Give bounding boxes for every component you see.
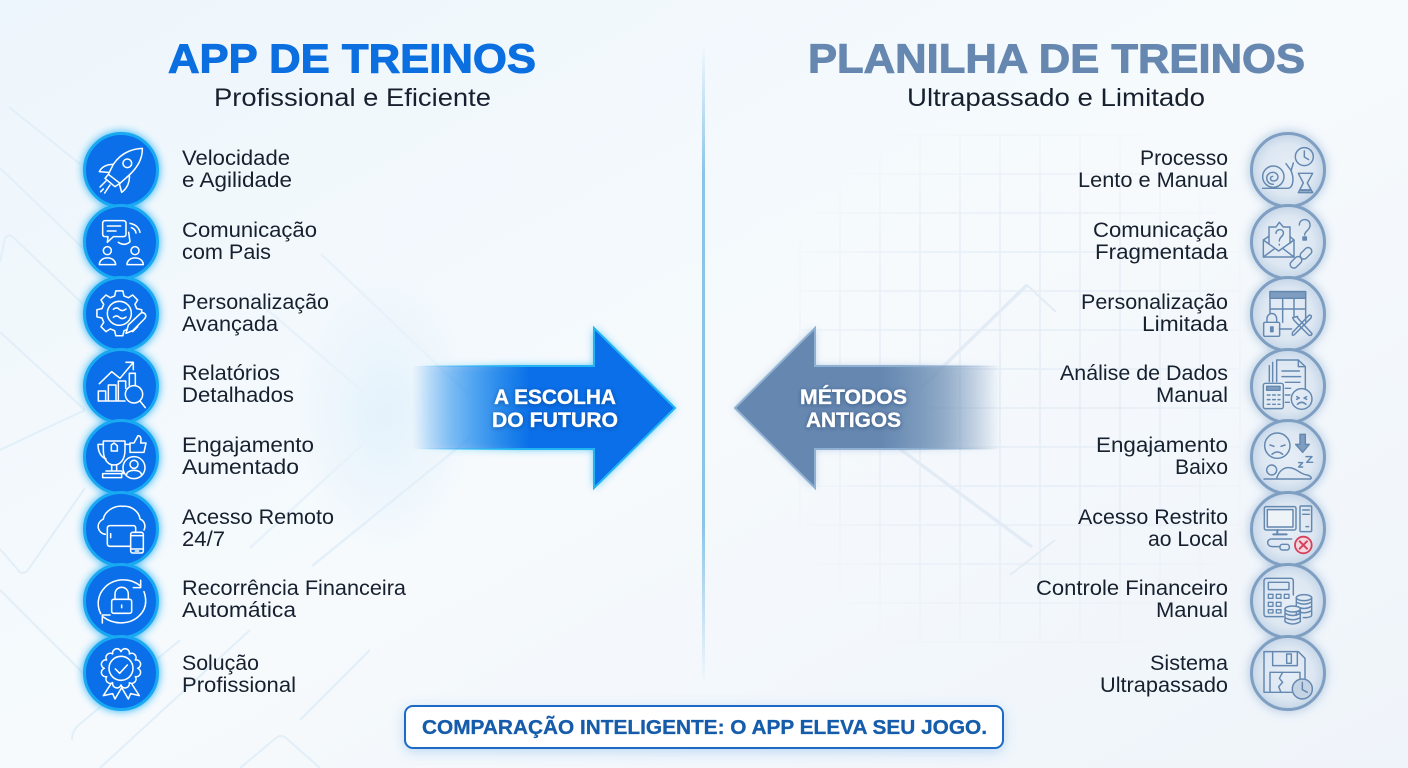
row: recorrencia [84, 564, 406, 638]
row: sistema ultrapassado: Sistema [1150, 652, 1228, 675]
arrow: metodos antigos [735, 328, 1000, 488]
icon: snail, clock and hourglass [1263, 148, 1313, 193]
background [0, 106, 1213, 768]
row: relatorios: Relatórios [182, 362, 280, 385]
icon: lock with cycle arrows [98, 580, 146, 623]
row: controle financeiro [1036, 564, 1324, 638]
row: acesso restrito [1078, 492, 1324, 566]
row: personalizacao: Avançada [182, 313, 278, 336]
circle shadow column [1249, 131, 1327, 712]
arrow label: MÉTODOS [800, 386, 907, 409]
row: engajamento baixo: Engajamento [1096, 434, 1228, 457]
panel: planilha de treinos header [808, 36, 1305, 112]
row: acesso remoto [84, 492, 334, 566]
arrow: a escolha do futuro [412, 328, 675, 488]
circle glow column [82, 131, 160, 712]
row: engajamento baixo [1096, 420, 1324, 494]
row: engajamento [84, 420, 314, 494]
row: comunicacao fragmentada: Fragmentada [1095, 241, 1228, 264]
row: sistema ultrapassado: Ultrapassado [1100, 674, 1228, 697]
callout: bottom tagline: COMPARAÇÃO INTELIGENTE: O APP ELEVA SEU JOGO. [422, 716, 987, 739]
row: comunicacao [84, 206, 317, 278]
icon: sad sleeping figure [1264, 433, 1313, 479]
subtitle: ultrapassado e limitado: Ultrapassado e Limitado [907, 84, 1205, 112]
icon: documents, calculator and sad face [1263, 360, 1312, 409]
icon: award badge [101, 649, 141, 699]
row: acesso restrito: ao Local [1148, 528, 1228, 551]
row: personalizacao [84, 278, 329, 350]
row: recorrencia: Automática [182, 599, 296, 622]
icon: chat and parents [99, 221, 143, 265]
icon: envelope, question mark and broken link [1263, 220, 1313, 270]
icon: table, lock and tools [1264, 292, 1312, 336]
row: comunicacao fragmentada [1093, 206, 1324, 278]
row: velocidade [84, 134, 292, 206]
icon: cloud and devices [98, 506, 145, 553]
central divider line [702, 45, 705, 685]
row: comunicacao: com Pais [182, 241, 271, 264]
panel: app benefits list [82, 131, 406, 712]
row: personalizacao: Personalização [182, 291, 329, 314]
row: comunicacao: Comunicação [182, 219, 317, 242]
row: processo: Lento e Manual [1078, 169, 1228, 192]
row: relatorios: Detalhados [182, 384, 294, 407]
row: analise de dados: Manual [1156, 384, 1228, 407]
panel: app de treinos header [168, 36, 536, 112]
icon: desktop computer with red x [1264, 506, 1312, 553]
row: velocidade: e Agilidade [182, 169, 292, 192]
icon: cracked floppy disk and clock [1264, 652, 1312, 699]
row: solucao: Solução [182, 652, 259, 675]
row: sistema ultrapassado [1100, 636, 1324, 710]
row: recorrencia: Recorrência Financeira [182, 577, 406, 600]
arrow label [800, 386, 907, 432]
arrow label: DO FUTURO [492, 409, 618, 432]
row: analise de dados [1060, 350, 1324, 422]
row: velocidade: Velocidade [182, 147, 290, 170]
row: personalizacao limitada: Limitada [1142, 313, 1228, 336]
row: solucao [84, 636, 296, 710]
row: acesso remoto: Acesso Remoto [182, 506, 334, 529]
row: relatorios [84, 350, 294, 422]
title: app de treinos: APP DE TREINOS [168, 36, 536, 82]
arrow label [492, 386, 618, 432]
row: engajamento baixo: Baixo [1175, 456, 1228, 479]
row: comunicacao fragmentada: Comunicação [1093, 219, 1228, 242]
row: processo: Processo [1140, 147, 1228, 170]
row: personalizacao limitada [1081, 278, 1324, 350]
subtitle: profissional e eficiente: Profissional e Eficiente [214, 84, 491, 112]
title: planilha de treinos: PLANILHA DE TREINOS [808, 36, 1305, 82]
icon: growth chart and magnifier [98, 362, 145, 408]
row: controle financeiro: Controle Financeiro [1036, 577, 1228, 600]
arrow label: ANTIGOS [806, 409, 901, 432]
row: engajamento: Engajamento [182, 434, 314, 457]
row: controle financeiro: Manual [1156, 599, 1228, 622]
icon: gear and pencil [97, 291, 146, 336]
callout: bottom tagline [405, 706, 1003, 748]
icon: rocket [99, 148, 142, 193]
panel: planilha drawbacks list [1036, 131, 1327, 712]
row: solucao: Profissional [182, 674, 296, 697]
arrow label: A ESCOLHA [494, 386, 616, 409]
row: acesso remoto: 24/7 [182, 528, 225, 551]
icon: calculator and coins [1264, 578, 1312, 624]
row: analise de dados: Análise de Dados [1060, 362, 1228, 385]
icon: trophy, thumb and user [98, 436, 146, 479]
row: acesso restrito: Acesso Restrito [1078, 506, 1228, 529]
row: personalizacao limitada: Personalização [1081, 291, 1228, 314]
row: engajamento: Aumentado [182, 456, 299, 479]
row: processo [1078, 134, 1324, 206]
